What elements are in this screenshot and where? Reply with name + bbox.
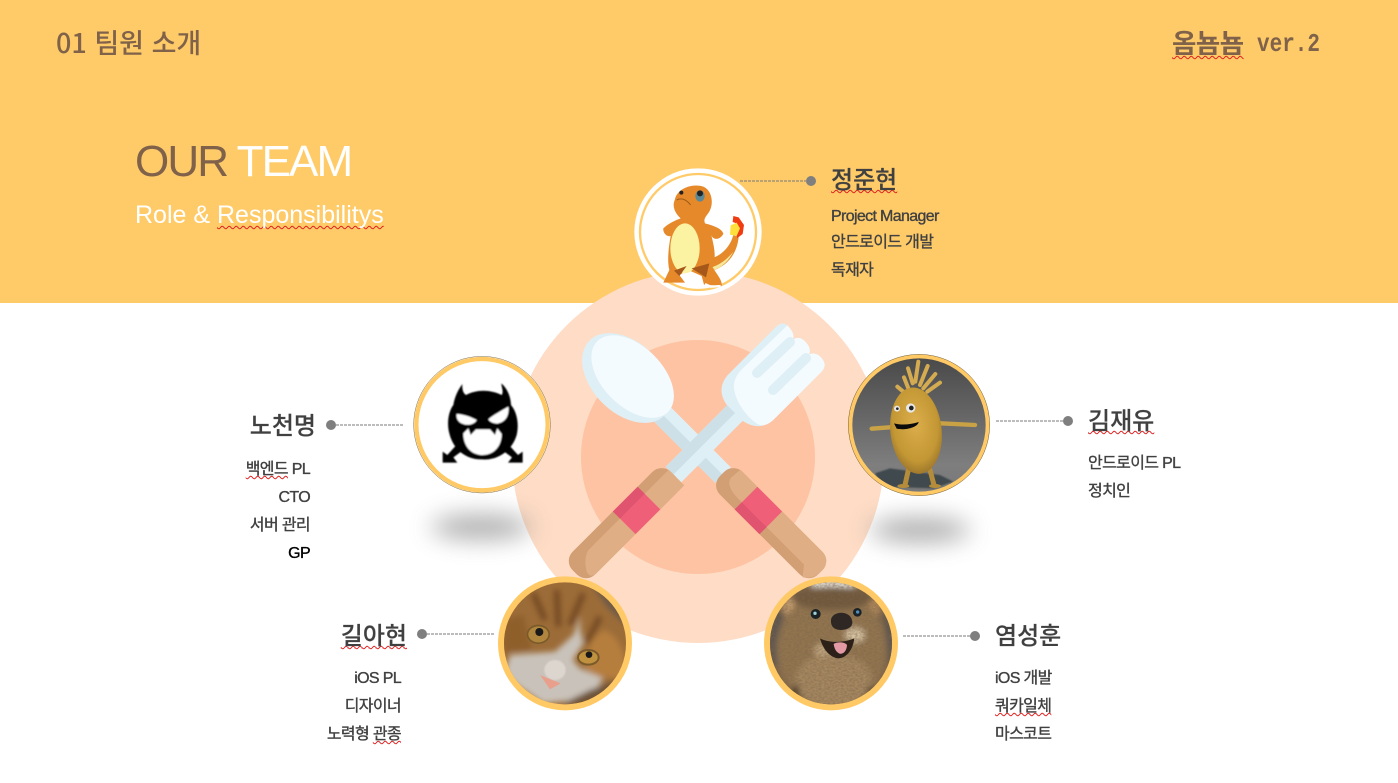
member: 염성훈 bbox=[995, 623, 1061, 743]
role list bbox=[327, 670, 402, 744]
role list: 쿼카일체 bbox=[995, 698, 1051, 715]
role list: 노력형 관종 bbox=[327, 726, 401, 743]
section title: 01 팀원 소개 bbox=[56, 22, 201, 61]
avatar: charmander bbox=[634, 168, 762, 296]
role list: iOS 개발 bbox=[995, 670, 1052, 687]
avatar: devil icon bbox=[414, 356, 550, 493]
role list bbox=[995, 669, 1052, 743]
plate: inner circle bbox=[581, 340, 815, 574]
role list: GP bbox=[288, 545, 310, 562]
subheading: Role & Responsibilitys bbox=[135, 201, 384, 229]
connector: 노천명 bbox=[326, 420, 404, 430]
shadow: right avatar bbox=[870, 518, 970, 542]
name: 김재유 bbox=[1088, 408, 1154, 435]
role list: 안드로이드 개발 bbox=[831, 234, 933, 251]
member: 김재유 bbox=[1088, 408, 1181, 500]
role list: iOS PL bbox=[354, 670, 401, 687]
role list: 백엔드 PL bbox=[246, 461, 310, 478]
plate: outer circle bbox=[512, 271, 884, 643]
icon: crossed spoon and fork bbox=[563, 316, 832, 584]
role list: 독재자 bbox=[831, 262, 873, 279]
fork bbox=[563, 320, 828, 584]
member: 길아현 bbox=[327, 623, 407, 744]
version label bbox=[1172, 29, 1320, 60]
connector: 염성훈 bbox=[903, 631, 980, 641]
avatar: quokka photo bbox=[764, 576, 898, 710]
role list: 마스코트 bbox=[995, 726, 1051, 743]
avatar: potato bbox=[848, 354, 990, 496]
connector: 길아현 bbox=[417, 629, 494, 639]
role list: 정치인 bbox=[1088, 483, 1130, 500]
name: 노천명 bbox=[250, 413, 316, 440]
role list: 안드로이드 PL bbox=[1088, 455, 1180, 472]
member: 노천명 bbox=[246, 413, 316, 562]
role list: 디자이너 bbox=[345, 698, 401, 715]
heading: our team: OUR TEAM bbox=[135, 137, 351, 186]
role list bbox=[246, 460, 310, 562]
header band bbox=[0, 0, 1398, 303]
connector: 정준현 bbox=[740, 176, 816, 186]
role list: Project Manager bbox=[831, 208, 939, 225]
version label: ver.2 bbox=[1257, 31, 1320, 60]
name: 길아현 bbox=[341, 623, 407, 650]
connector: 김재유 bbox=[996, 416, 1073, 426]
version label: 옴뇸뇸 bbox=[1172, 29, 1244, 59]
role list bbox=[831, 208, 940, 279]
role list: 서버 관리 bbox=[250, 517, 310, 534]
member: 정준현 bbox=[831, 167, 940, 279]
name: 정준현 bbox=[831, 167, 897, 194]
avatar: cat photo bbox=[498, 576, 632, 710]
shadow: left avatar bbox=[431, 515, 531, 539]
role list: CTO bbox=[278, 489, 310, 506]
name: 염성훈 bbox=[995, 623, 1061, 650]
spoon bbox=[565, 316, 832, 584]
role list bbox=[1088, 454, 1181, 500]
